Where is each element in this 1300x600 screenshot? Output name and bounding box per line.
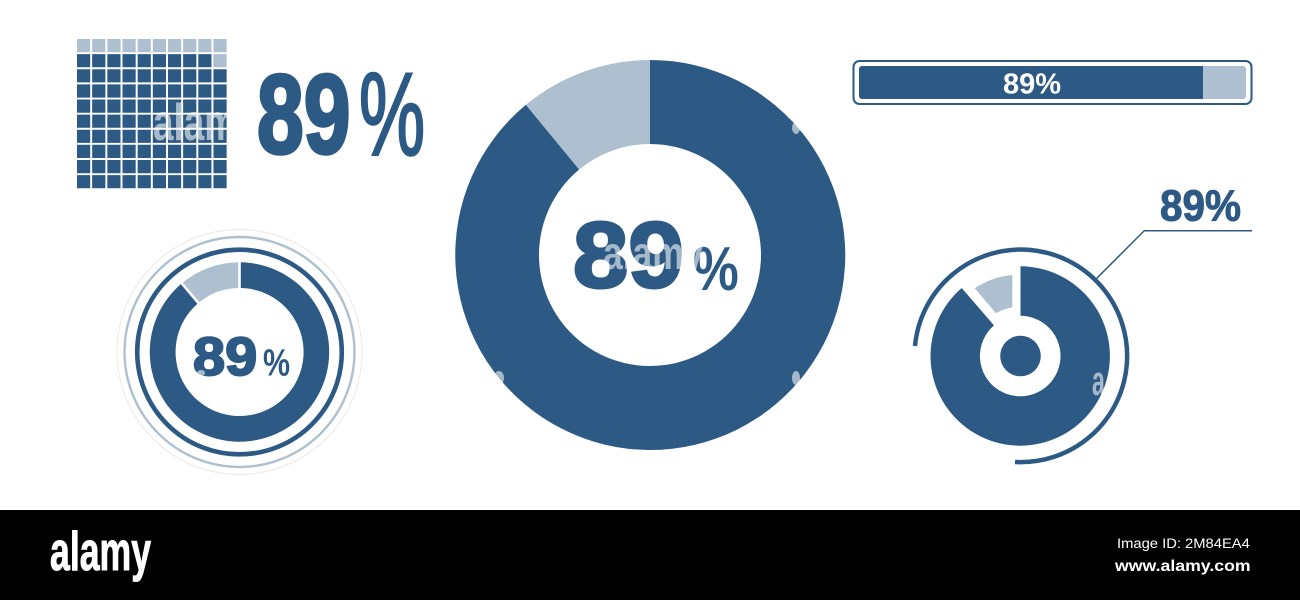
donut: filled segment: [930, 266, 1110, 446]
light ring: [124, 237, 354, 467]
panel: exploded donut with callout: [915, 181, 1252, 462]
heading: 89% large: [257, 49, 425, 180]
label: 89% in ringed donut: 89: [193, 326, 257, 387]
label: 89% in ringed donut: [193, 326, 290, 387]
label: 89% in donut: 89: [573, 204, 684, 307]
bar remaining: [1203, 66, 1246, 99]
donut: remaining segment: [182, 262, 240, 303]
website: www.alamy.com: [1114, 557, 1251, 575]
panel: waffle grid percentage: [77, 46, 425, 182]
chart: 10 by 10 waffle grid, 89 filled: [77, 46, 227, 182]
outer faint ring: [117, 230, 362, 474]
image id: Image ID: 2M84EA4: [1117, 536, 1250, 552]
dark ring: [137, 250, 342, 454]
bar frame: [854, 61, 1252, 104]
centre dot: [1000, 336, 1041, 376]
label: 89% in ringed donut: %: [263, 342, 290, 384]
footer logo: alamy: [50, 520, 151, 582]
donut: filled segment: [150, 262, 329, 442]
watermark fragments: a: [1092, 358, 1106, 405]
callout leader line: [1097, 231, 1252, 278]
panel: large donut chart: [455, 60, 845, 450]
donut: remaining segment: [975, 275, 1012, 313]
donut: remaining segment: [526, 60, 650, 170]
watermark fragments: [153, 93, 1106, 405]
footer bar: [0, 510, 1300, 600]
panel: progress bar: [854, 61, 1252, 104]
bar filled: [859, 66, 1203, 99]
heading: 89% large: 89: [257, 51, 350, 177]
bar label: 89%: [1003, 68, 1061, 100]
watermark fragments: alamy: [153, 93, 258, 152]
outer arc: [915, 250, 1127, 462]
footer background: [0, 510, 1300, 600]
watermark fragments: alamy: [603, 228, 704, 279]
label: 89% in donut: [573, 204, 739, 307]
label: 89% in donut: %: [693, 235, 739, 304]
heading: 89% large: %: [359, 49, 425, 180]
panel: ringed donut chart: [117, 230, 362, 474]
donut: filled segment: [455, 60, 845, 450]
callout label: 89%: [1160, 181, 1241, 230]
